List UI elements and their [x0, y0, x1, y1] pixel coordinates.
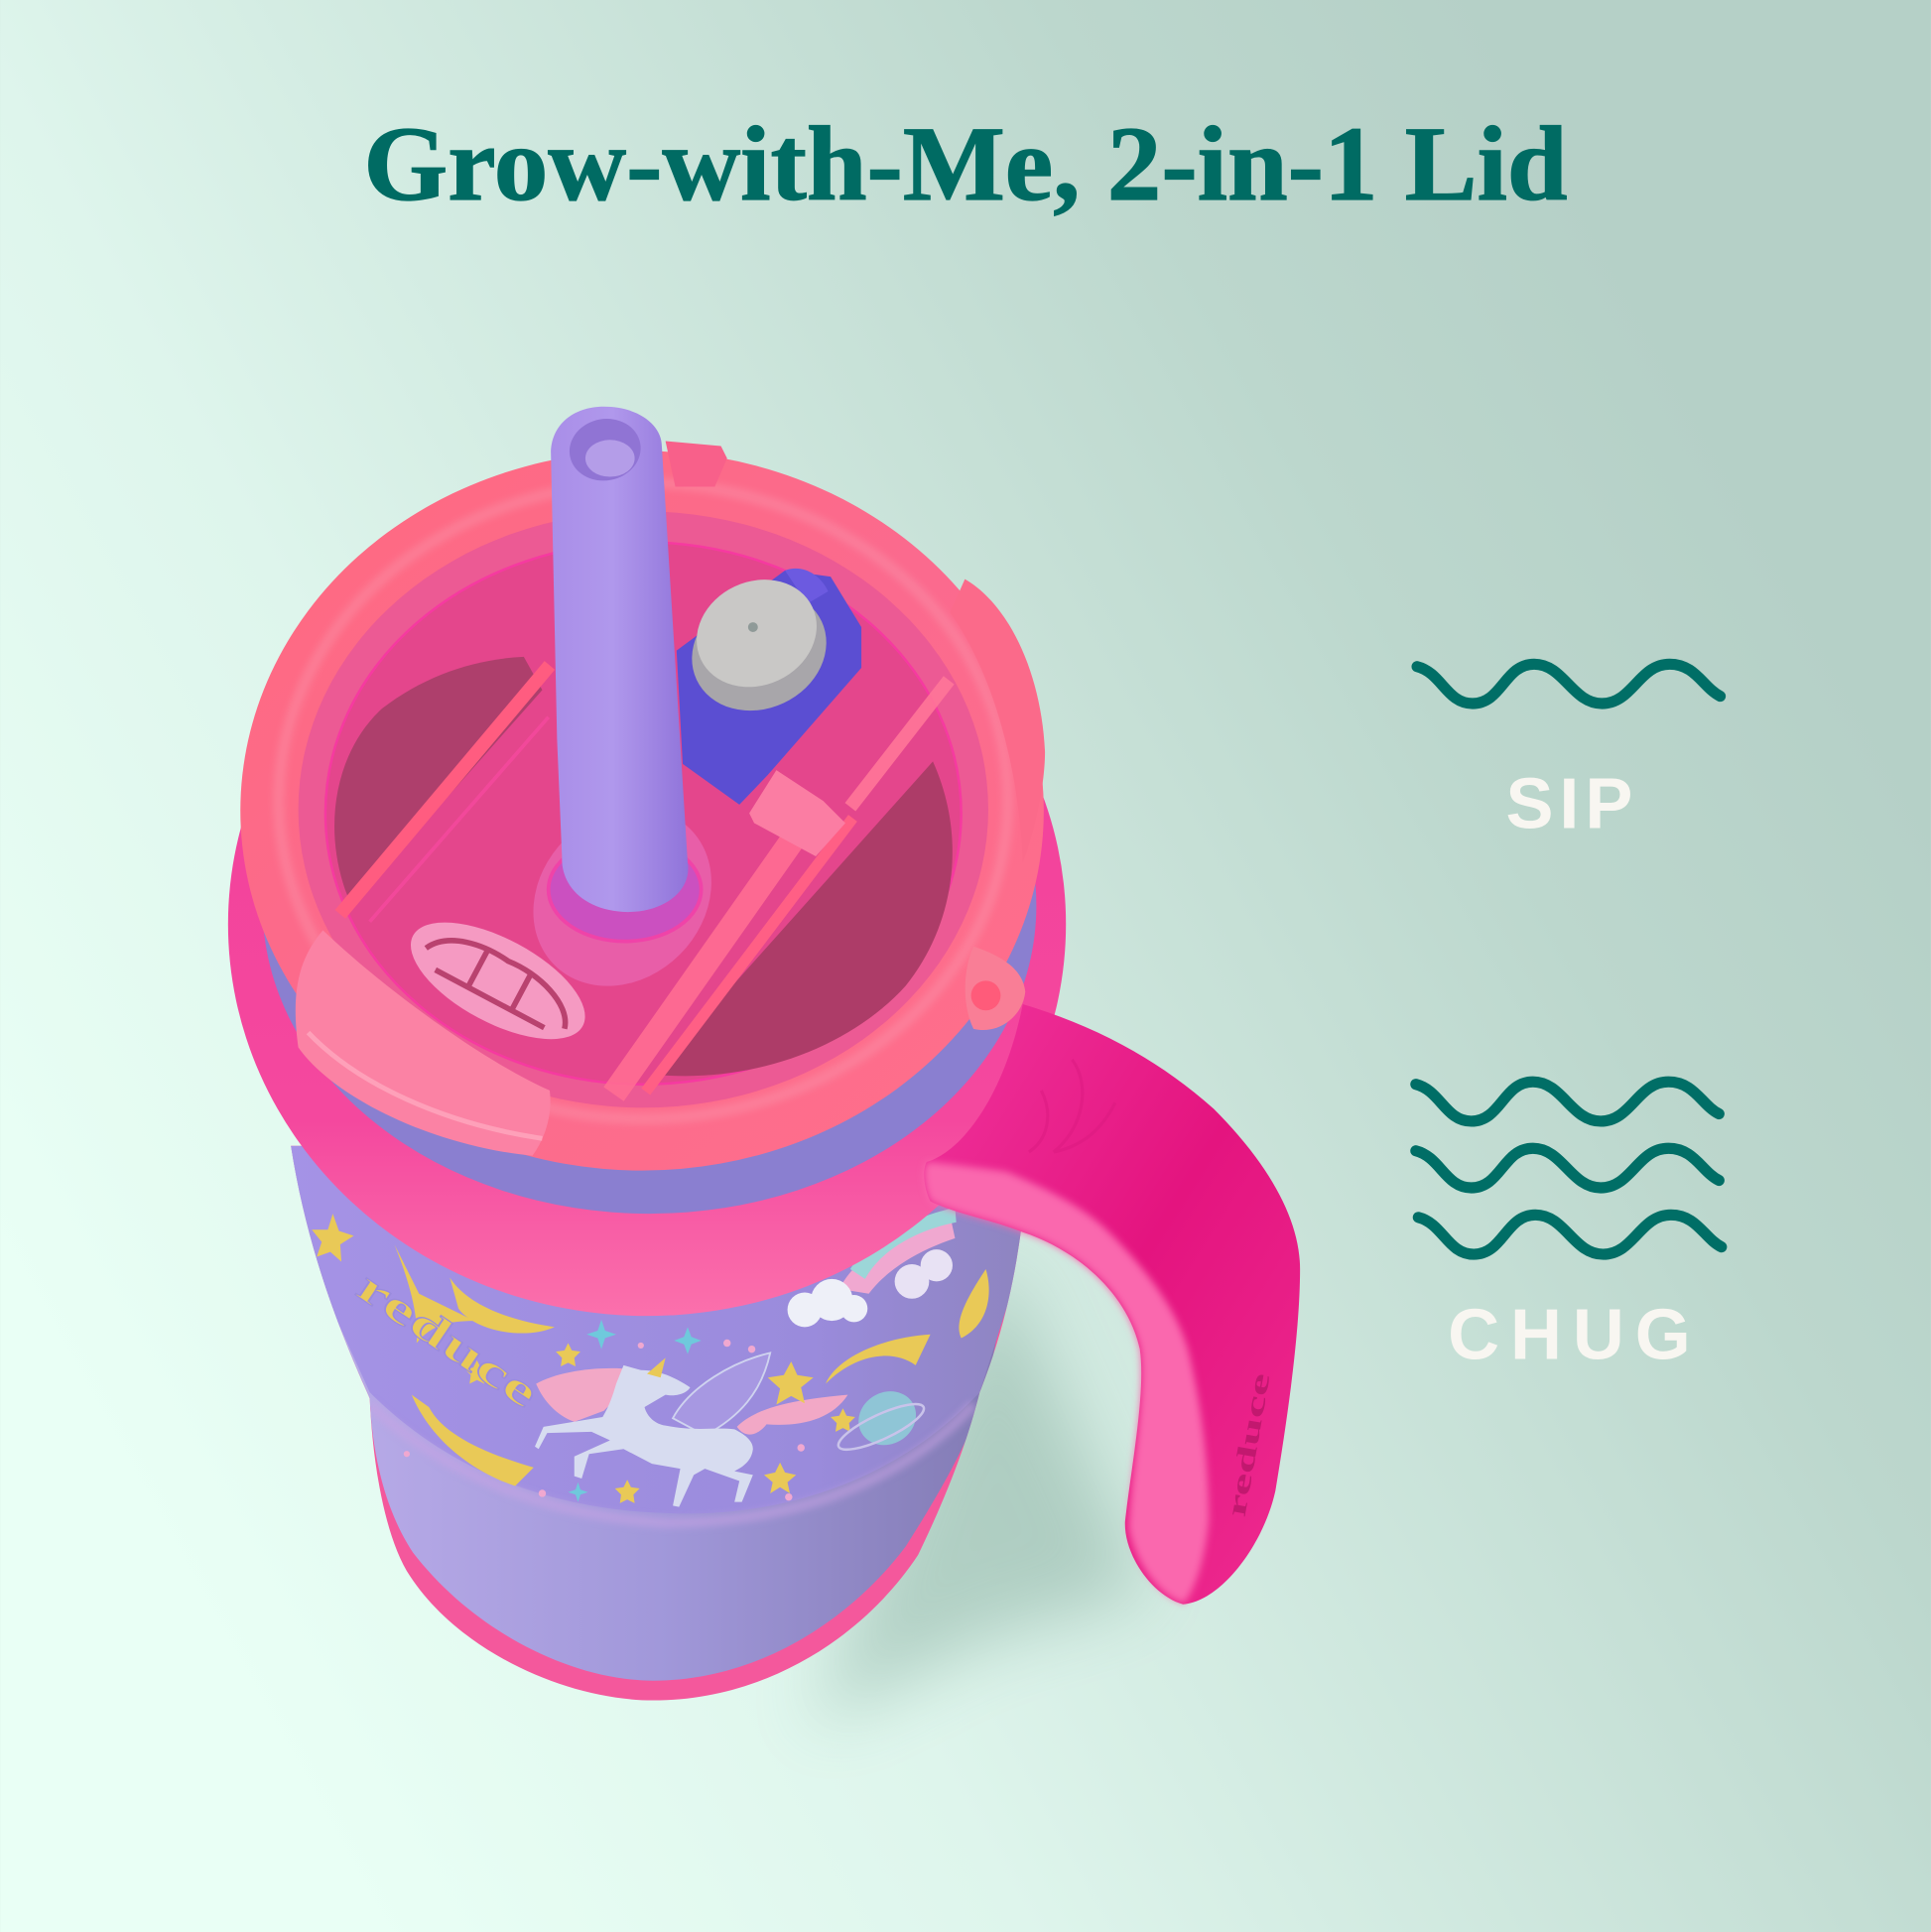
straw opening — [565, 413, 646, 486]
collar band — [228, 532, 1066, 1316]
hinge block — [749, 770, 845, 856]
lid inner disk — [325, 542, 962, 1085]
lid rim highlight rings — [279, 483, 1008, 1118]
print: shooting stars and moons — [312, 1214, 989, 1503]
cup body — [291, 1145, 1021, 1701]
chug icon: three waves — [1416, 1082, 1722, 1254]
lid ribs — [340, 666, 949, 1095]
cup shadow — [814, 1257, 1146, 1725]
chug label: CHUG — [1448, 1296, 1691, 1375]
handle leaf logo — [1029, 1060, 1115, 1152]
right opening — [653, 761, 953, 1076]
purple inner ring — [263, 597, 1036, 1214]
vent oval — [393, 899, 602, 1063]
title: Grow-with-Me, 2-in-1 Lid — [363, 106, 1568, 223]
product: tumbler cup — [228, 407, 1300, 1701]
grey plug — [672, 561, 846, 732]
lid hinge tab — [296, 930, 551, 1156]
print: clouds and rainbow — [788, 1208, 957, 1327]
right knob — [966, 947, 1025, 1030]
handle — [924, 1004, 1300, 1605]
left opening — [334, 657, 542, 906]
top tab — [666, 442, 727, 486]
print: reduce wordmark: reduce — [348, 1261, 548, 1418]
lid — [240, 407, 1045, 1171]
straw socket — [497, 772, 748, 1022]
blue socket piece — [677, 571, 861, 805]
print: planet and sparkles — [404, 1320, 929, 1502]
print: unicorn — [535, 1352, 847, 1507]
straw — [551, 407, 688, 912]
lid outer rim — [240, 451, 1044, 1171]
right arc tab — [950, 580, 1045, 862]
handle brand text: reduce — [1222, 1370, 1276, 1519]
sip label: SIP — [1505, 764, 1632, 843]
sip icon: single wave — [1417, 664, 1721, 704]
